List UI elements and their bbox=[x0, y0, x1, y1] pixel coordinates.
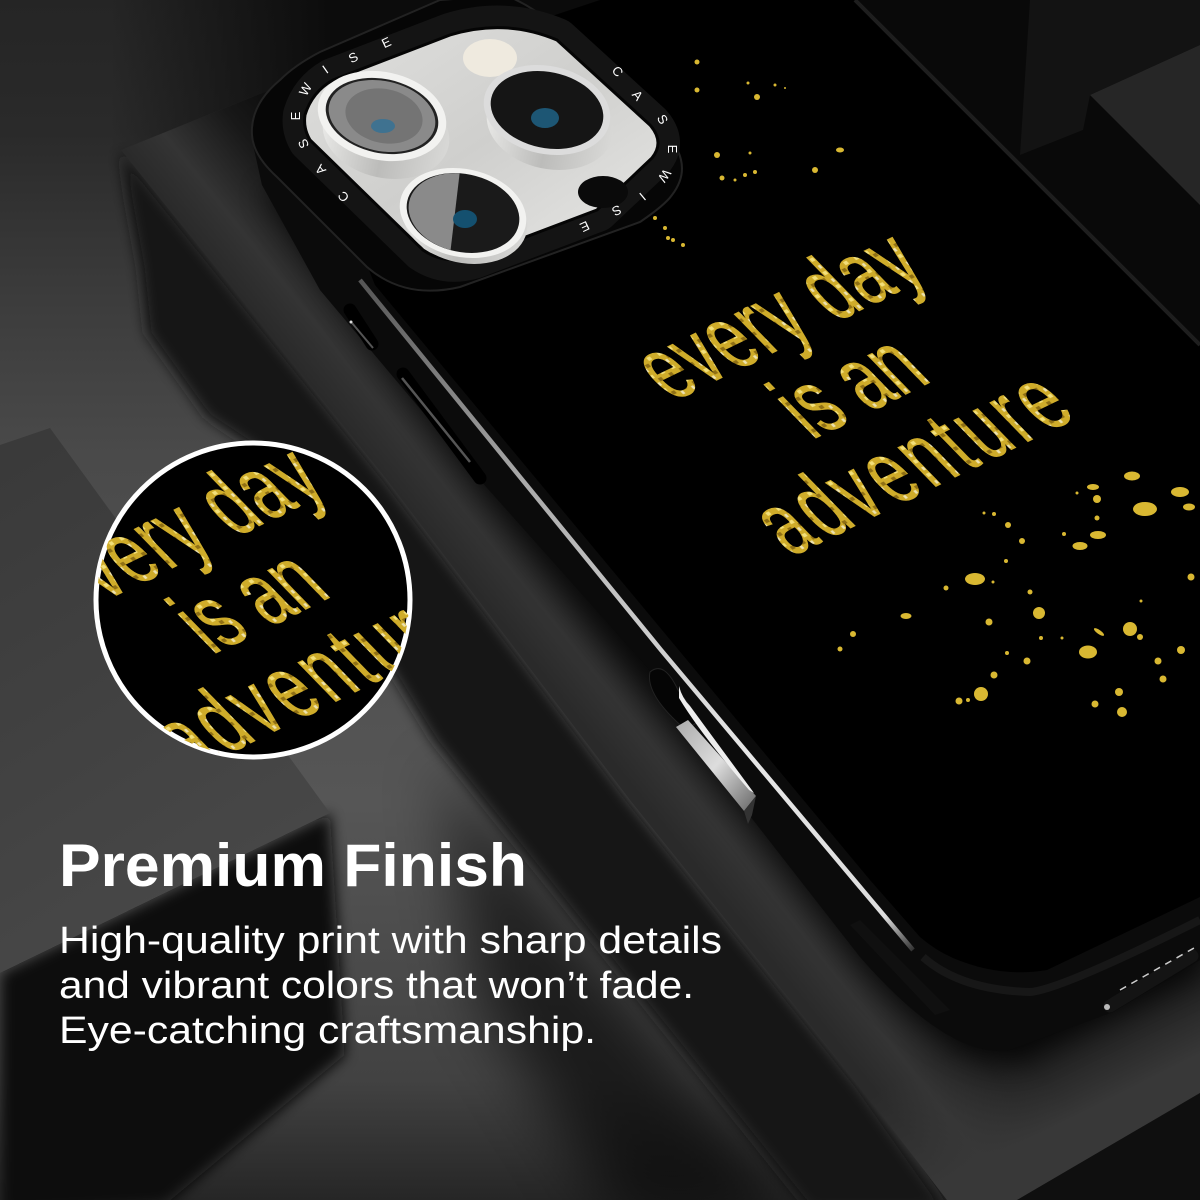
magnifier circle bbox=[94, 440, 412, 760]
button: silent switch bbox=[350, 310, 373, 348]
ring text: CASEWISE right: E bbox=[577, 218, 592, 235]
magnified gold text: is an bbox=[148, 530, 349, 671]
ring text: CASEWISE left: I bbox=[320, 62, 331, 77]
lens one bbox=[309, 59, 458, 190]
gold print text bbox=[608, 209, 1099, 573]
phone body bbox=[252, 0, 1200, 1051]
phone shadow bbox=[262, 190, 1200, 1062]
ring text: CASEWISE left: W bbox=[296, 80, 315, 98]
flash bbox=[463, 39, 517, 77]
ring text: CASEWISE left: S bbox=[346, 49, 361, 66]
gold splatter bbox=[653, 60, 1195, 717]
ring text: CASEWISE right: E bbox=[665, 145, 680, 154]
heading: Premium Finish bbox=[59, 832, 527, 899]
magnified gold text bbox=[98, 452, 408, 752]
speaker slot bbox=[1104, 948, 1194, 1010]
description text bbox=[59, 920, 722, 1052]
button: volume bbox=[402, 374, 480, 478]
magnified gold text: every day bbox=[8, 424, 348, 633]
ring text: CASEWISE right: C bbox=[609, 63, 626, 80]
ring text: CASEWISE left: S bbox=[295, 136, 312, 151]
description text: Eye-catching craftsmanship. bbox=[59, 1010, 596, 1052]
gold print text: adventure bbox=[727, 349, 1099, 573]
ring text: CASEWISE left: E bbox=[379, 34, 394, 51]
ring text: CASEWISE left: E bbox=[288, 111, 303, 120]
ring text: CASEWISE right: A bbox=[629, 87, 646, 104]
ring text: CASEWISE left bbox=[288, 34, 394, 205]
description text: and vibrant colors that won’t fade. bbox=[59, 965, 694, 1007]
lens two bbox=[475, 54, 622, 181]
ring text: CASEWISE left: C bbox=[335, 188, 352, 205]
ring text: CASEWISE right: I bbox=[636, 190, 649, 204]
ring text: CASEWISE right: W bbox=[655, 166, 674, 186]
silver camera plate bbox=[305, 28, 658, 260]
ring band bbox=[305, 28, 658, 260]
lens three bbox=[400, 168, 526, 264]
camera bump bbox=[252, 0, 682, 291]
microphone hole bbox=[578, 176, 628, 208]
ring text: CASEWISE left: A bbox=[312, 161, 329, 178]
ring text: CASEWISE right: S bbox=[609, 202, 624, 219]
ring text: CASEWISE right: S bbox=[654, 112, 671, 127]
ring text: CASEWISE right bbox=[577, 63, 680, 235]
description text: High-quality print with sharp details bbox=[59, 920, 722, 962]
gold print text: every day bbox=[608, 209, 948, 418]
magnified gold text: adventure bbox=[127, 564, 499, 788]
gold print text: is an bbox=[748, 315, 949, 456]
button: side silver bbox=[649, 669, 756, 824]
